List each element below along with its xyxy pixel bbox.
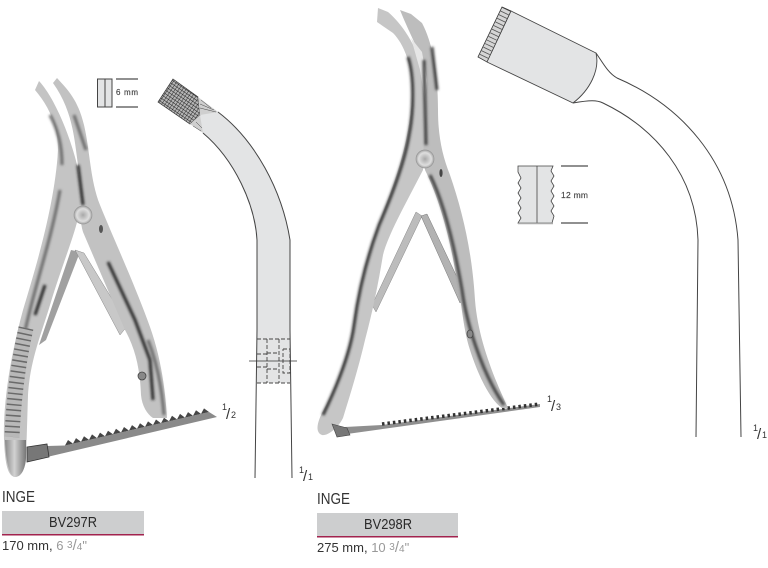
product label: BV297R: / <box>73 537 78 554</box>
arm dark groove <box>35 165 153 400</box>
arm shading <box>10 115 164 430</box>
product label: BV298R <box>317 491 458 556</box>
product label: BV298R: 3 <box>389 542 395 553</box>
product label: BV297R: 3 <box>67 540 73 551</box>
jaw window <box>411 38 427 100</box>
scale 1/1 left: 1 <box>308 472 313 482</box>
instrument photo: BV297R forceps <box>4 78 217 477</box>
product label: BV297R: INGE <box>2 489 35 506</box>
rack teeth <box>65 408 209 446</box>
scale 1/3: 3 <box>556 402 561 412</box>
scale 1/1 right: 1 <box>762 430 767 440</box>
rack hinge <box>27 444 49 462</box>
grip ridges <box>12 328 26 437</box>
scale 1/3: / <box>551 398 556 415</box>
rack teeth <box>382 404 540 424</box>
arm shading <box>323 57 413 415</box>
product label: BV298R: 275 mm, 10 <box>317 540 386 555</box>
blade detail 1/1: BV297R <box>158 79 297 478</box>
right arm shading <box>424 47 504 405</box>
left strut <box>372 212 422 312</box>
dashed joint <box>257 339 290 383</box>
product label: BV297R <box>2 489 144 554</box>
serrated grip <box>12 328 26 437</box>
scale 1/1 left: / <box>303 468 308 485</box>
right strut <box>421 214 466 303</box>
instrument photo: BV298R forceps <box>318 8 540 437</box>
product label: BV298R: INGE <box>317 491 350 508</box>
lower rivet <box>467 330 473 338</box>
scale 1/1 right: / <box>757 426 762 443</box>
product label: BV298R: 4" <box>399 540 409 555</box>
pivot screw <box>416 150 434 168</box>
rack body <box>47 412 217 457</box>
grip bottom <box>5 440 26 477</box>
curved shaft outlines <box>573 53 741 437</box>
scale 1/3: 1 <box>547 394 552 404</box>
tip teeth <box>482 9 506 60</box>
width icon: 12 mm <box>518 166 588 224</box>
left arm <box>318 8 425 435</box>
grey blade <box>158 79 290 383</box>
wide grey head <box>478 7 597 103</box>
small screw <box>99 225 103 233</box>
scale 1/1 left: 1 <box>299 465 304 475</box>
scale 1/2: 2 <box>231 410 236 420</box>
blade detail 1/1: BV298R <box>478 7 741 437</box>
width icon: 6 mm <box>98 79 138 107</box>
product label: BV297R: 4" <box>77 538 87 553</box>
product label: BV297R: BV297R <box>49 514 97 531</box>
hatching <box>190 97 218 133</box>
serrated tip <box>478 7 511 62</box>
joint centre line <box>249 360 297 362</box>
scale 1/1 right <box>753 423 767 443</box>
scale 1/1 left <box>299 465 313 485</box>
lower rivet <box>138 372 146 380</box>
scale 1/2 <box>222 402 236 423</box>
left strut <box>39 250 80 345</box>
width icon: 12 mm: 12 mm <box>561 190 588 200</box>
rack <box>345 404 540 434</box>
blade outlines <box>203 112 292 478</box>
crosshatched tip <box>158 79 200 124</box>
head outline <box>487 11 597 103</box>
right arm <box>53 78 167 418</box>
width icon: 6 mm: 6 mm <box>116 88 138 97</box>
product label: BV297R: 170 mm, 6 <box>2 538 63 553</box>
right arm <box>400 10 508 408</box>
product label: BV298R: / <box>395 539 400 556</box>
scale 1/2: / <box>226 406 231 423</box>
pivot screw <box>74 206 92 224</box>
scale 1/3 <box>547 394 561 415</box>
product label: BV298R: BV298R <box>364 516 412 533</box>
right strut <box>75 250 128 335</box>
small screw <box>439 169 443 177</box>
left arm <box>4 81 80 477</box>
scale 1/2: 1 <box>222 402 227 412</box>
scale 1/1 right: 1 <box>753 423 758 433</box>
rack hinge <box>332 424 350 437</box>
serrated plate <box>518 166 554 223</box>
